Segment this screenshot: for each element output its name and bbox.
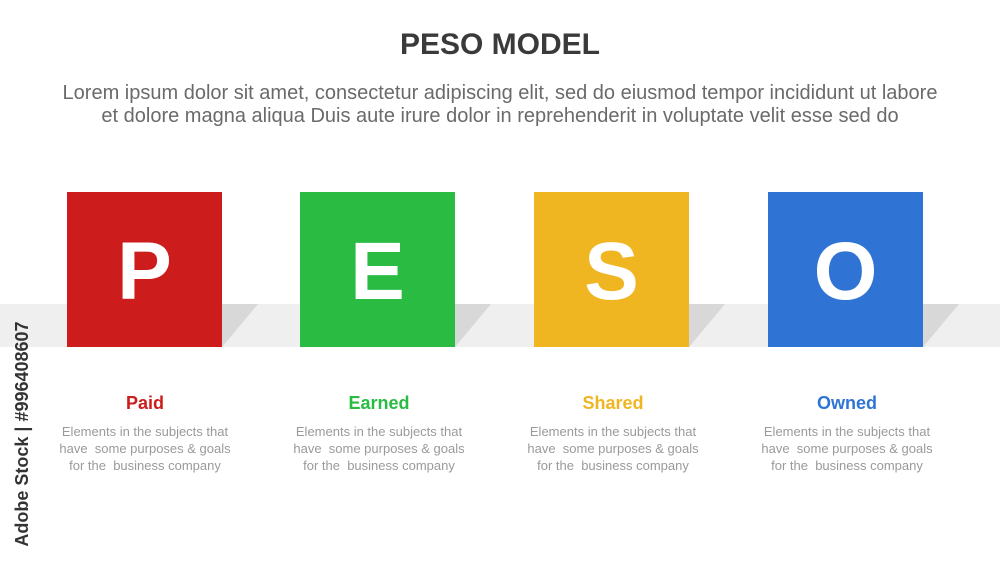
gray band bbox=[0, 304, 1000, 347]
desc Earned: for the business company bbox=[303, 458, 455, 473]
subtitle text: et dolore magna aliqua Duis aute irure dolor in reprehenderit in voluptate velit esse sed do bbox=[101, 105, 899, 127]
desc Owned: for the business company bbox=[771, 458, 923, 473]
desc Paid: for the business company bbox=[69, 458, 221, 473]
desc Shared: Elements in the subjects that bbox=[530, 424, 696, 439]
desc Owned: have some purposes & goals bbox=[761, 441, 933, 456]
desc Shared: have some purposes & goals bbox=[527, 441, 699, 456]
label Owned: Owned bbox=[817, 393, 877, 413]
panel: P square: P bbox=[117, 226, 172, 317]
desc Owned: Elements in the subjects that bbox=[764, 424, 930, 439]
desc Earned bbox=[293, 424, 465, 473]
panel: S square: S bbox=[584, 226, 639, 317]
panel: S square bbox=[534, 192, 689, 347]
desc Earned: have some purposes & goals bbox=[293, 441, 465, 456]
title: PESO MODEL bbox=[400, 28, 600, 61]
desc Paid: Elements in the subjects that bbox=[62, 424, 228, 439]
label Earned: Earned bbox=[348, 393, 410, 413]
label Paid: Paid bbox=[126, 393, 164, 413]
subtitle text: Lorem ipsum dolor sit amet, consectetur adipiscing elit, sed do eiusmod tempor incididunt ut labore bbox=[63, 82, 937, 104]
panel: P square bbox=[67, 192, 222, 347]
desc Paid bbox=[59, 424, 231, 473]
panel: O square bbox=[768, 192, 923, 347]
subtitle text bbox=[63, 82, 937, 127]
label Shared: Shared bbox=[582, 393, 644, 413]
panel: O square: O bbox=[814, 226, 877, 317]
desc Shared bbox=[527, 424, 699, 473]
desc Shared: for the business company bbox=[537, 458, 689, 473]
desc Earned: Elements in the subjects that bbox=[296, 424, 462, 439]
desc Paid: have some purposes & goals bbox=[59, 441, 231, 456]
panel: E square bbox=[300, 192, 455, 347]
panel: E square: E bbox=[350, 226, 405, 317]
desc Owned bbox=[761, 424, 933, 473]
watermark vertical text: Adobe Stock | #996408607 bbox=[12, 321, 32, 547]
